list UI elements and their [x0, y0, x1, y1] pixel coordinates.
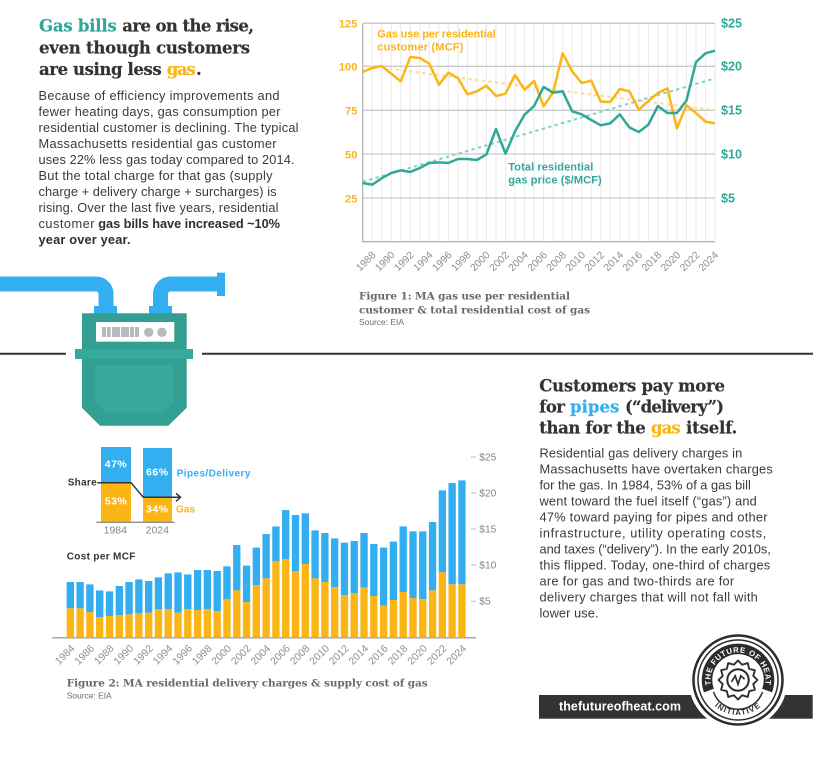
series label: gas use: Gas use per residential: [377, 29, 496, 41]
x axis years: 1990: [112, 643, 136, 667]
x axis years: 2006: [526, 250, 550, 274]
chart: cost per MCF stacked bars: [52, 453, 497, 667]
x axis years: 2002: [230, 643, 254, 667]
x axis years: 1986: [73, 643, 97, 667]
caption: figure 2: [67, 678, 428, 700]
body text: efficiency and consumption: year over year.: [38, 232, 130, 247]
chart: share of bill 1984 vs 2024: 2024: [146, 525, 169, 537]
heading: gas bills are on the rise: .: [196, 60, 202, 79]
heading: gas bills are on the rise: are using less: [39, 60, 162, 79]
body text: efficiency and consumption: customer: [38, 216, 95, 231]
body text: efficiency and consumption: But the total charge for that gas (supply: [38, 168, 273, 183]
x axis years: 2022: [678, 250, 703, 274]
body text: delivery charges: Residential gas delivery charges in: [540, 445, 742, 460]
x axis years: 2008: [545, 250, 569, 274]
chart: share of bill 1984 vs 2024: 53%: [105, 495, 127, 507]
x axis years: 2020: [659, 250, 683, 274]
right axis: price: $25: [721, 16, 742, 30]
right axis: price: $15: [721, 104, 742, 118]
chart: share of bill 1984 vs 2024: 47%: [105, 459, 127, 471]
body text: efficiency and consumption: [38, 88, 298, 247]
body text: delivery charges: went toward the fuel itself (“gas”) and: [538, 493, 757, 508]
body text: efficiency and consumption: uses 22% less gas today compared to 2014.: [38, 152, 294, 167]
icon: gas meter with pipes: [0, 273, 225, 426]
chart: share of bill 1984 vs 2024: 34%: [146, 503, 169, 515]
heading: customers pay more for pipes: (“delivery”): [625, 398, 724, 417]
heading: customers pay more for pipes: [539, 377, 737, 437]
x axis years: 2002: [488, 250, 512, 274]
footer bar with website: [539, 695, 813, 719]
x axis years: 1990: [374, 250, 398, 274]
caption: figure 2: Source: EIA: [67, 690, 112, 700]
x axis years: 2014: [347, 643, 371, 667]
chart: share of bill 1984 vs 2024: Gas: [176, 504, 195, 515]
x axis years: 1992: [393, 250, 417, 274]
x axis years: 2000: [469, 250, 493, 274]
series label: gas use: [377, 29, 496, 54]
heading: gas bills are on the rise: even though customers: [39, 38, 250, 57]
x axis years: 1996: [171, 643, 195, 667]
caption: figure 1: Source: EIA: [359, 317, 404, 327]
body text: delivery charges: Massachusetts have overtaken charges: [540, 461, 773, 476]
heading: gas bills are on the rise: are on the rise,: [122, 17, 254, 36]
price axis: $20: [479, 489, 497, 500]
body text: delivery charges: infrastructure, utility operating costs,: [540, 525, 766, 540]
price axis: $25: [479, 453, 497, 464]
x axis years: [354, 250, 721, 274]
left axis: gas use: 25: [345, 194, 358, 206]
body text: delivery charges: this flipped. Today, one-third of charges: [540, 557, 770, 572]
body text: efficiency and consumption: Massachusetts residential gas customer: [38, 136, 277, 151]
chart: gas use and residential price line chart: [339, 16, 742, 274]
body text: delivery charges: lower use.: [540, 605, 598, 620]
left axis: gas use: [339, 18, 358, 206]
x axis years: 2016: [621, 250, 645, 274]
body text: efficiency and consumption: residential customer is declining. The typical: [38, 120, 298, 135]
chart: share of bill 1984 vs 2024: 1984: [104, 525, 127, 537]
x axis years: 2020: [406, 643, 430, 667]
x axis years: 2016: [367, 643, 391, 667]
x axis years: 2022: [425, 643, 450, 667]
body text: delivery charges: [538, 445, 773, 620]
body text: delivery charges: are for gas and two-thirds are for: [540, 573, 735, 588]
right axis: price: $20: [721, 60, 742, 74]
right axis: price: $5: [721, 192, 735, 206]
caption: figure 2: Figure 2: MA residential delivery charges & supply cost of gas: [67, 678, 428, 690]
panel: pipes vs gas text: [538, 377, 773, 620]
x axis years: 1988: [354, 250, 379, 274]
body text: efficiency and consumption: gas bills have increased ~10%: [98, 216, 281, 231]
caption: figure 1: [359, 290, 590, 327]
x axis years: 2018: [386, 643, 411, 667]
x axis years: 1998: [191, 643, 215, 667]
price axis: $5: [479, 597, 491, 608]
x axis years: 1984: [53, 643, 78, 667]
body text: delivery charges: delivery charges that will not fall with: [540, 589, 758, 604]
chart: share of bill 1984 vs 2024: [68, 447, 251, 537]
body text: efficiency and consumption: charge + delivery charge + surcharges) is: [38, 184, 276, 199]
x axis years: 2024: [697, 250, 721, 274]
left axis: gas use: 125: [339, 18, 358, 30]
body text: efficiency and consumption: rising. Over the last five years, residential: [38, 200, 278, 215]
heading: customers pay more for pipes: for: [539, 398, 565, 417]
x axis years: 1994: [151, 643, 176, 667]
panel: gas bills text: [38, 17, 298, 247]
x axis years: 2010: [308, 643, 332, 667]
arrow: share line: [97, 483, 180, 501]
x axis years: 1994: [412, 250, 436, 274]
x axis years: 2018: [640, 250, 664, 274]
x axis years: 1996: [431, 250, 455, 274]
heading: gas bills are on the rise: [39, 17, 254, 79]
heading: gas bills are on the rise: Gas bills: [39, 17, 117, 36]
x axis years: 1992: [132, 643, 156, 667]
heading: customers pay more for pipes: gas: [651, 418, 681, 437]
price axis: $15: [479, 525, 497, 536]
right axis: price: $10: [721, 148, 742, 162]
label: cost per MCF: Cost per MCF: [67, 552, 135, 563]
heading: gas bills are on the rise: gas: [167, 60, 196, 79]
x axis years: 2012: [328, 643, 352, 667]
left axis: gas use: 75: [345, 106, 358, 118]
x axis years: 1998: [450, 250, 474, 274]
price axis: [479, 453, 497, 608]
x axis years: 2010: [564, 250, 588, 274]
series label: gas price: gas price ($/MCF): [508, 175, 602, 187]
body text: efficiency and consumption: Because of efficiency improvements and: [38, 88, 280, 103]
x axis years: 2024: [445, 643, 469, 667]
x axis years: 2004: [249, 643, 273, 667]
heading: customers pay more for pipes: itself.: [686, 418, 737, 437]
series label: gas use: customer (MCF): [377, 42, 464, 54]
series label: gas price: [508, 162, 602, 187]
heading: customers pay more for pipes: Customers pay more: [539, 377, 725, 396]
body text: delivery charges: and taxes (“delivery”). In the early 2010s,: [540, 541, 771, 556]
x axis years: 2014: [602, 250, 626, 274]
chart: share of bill 1984 vs 2024: 66%: [146, 467, 169, 479]
x axis years: 2008: [288, 643, 313, 667]
logo: the future of heat initiative: [690, 634, 786, 726]
x axis years: [53, 643, 469, 667]
body text: delivery charges: for the gas. In 1984, 53% of a gas bill: [540, 477, 751, 492]
logo: the future of heat initiative: THE FUTURE OF HEAT: [705, 647, 771, 686]
left axis: gas use: 50: [345, 150, 358, 162]
heading: customers pay more for pipes: than for the: [539, 418, 646, 437]
x axis years: 2000: [210, 643, 234, 667]
heading: customers pay more for pipes: pipes: [570, 398, 619, 417]
body text: efficiency and consumption: fewer heating days, gas consumption per: [38, 104, 281, 119]
series label: gas price: Total residential: [508, 162, 593, 174]
right axis: price: [721, 16, 742, 206]
caption: figure 1: Figure 1: MA gas use per residential: [359, 290, 570, 302]
body text: delivery charges: 47% toward paying for pipes and other: [540, 509, 768, 524]
x axis years: 2006: [269, 643, 293, 667]
left axis: gas use: 100: [339, 62, 358, 74]
x axis years: 1988: [93, 643, 117, 667]
chart: share of bill 1984 vs 2024: Pipes/Delivery: [177, 469, 251, 480]
logo: the future of heat initiative: INITIATIVE: [715, 702, 760, 715]
x axis years: 2004: [507, 250, 531, 274]
caption: figure 1: customer & total residential cost of gas: [359, 304, 590, 316]
x axis years: 2012: [583, 250, 607, 274]
price axis: $10: [479, 561, 497, 572]
footer bar with website: thefutureofheat.com: [559, 699, 681, 713]
chart: share of bill 1984 vs 2024: Share: [68, 478, 97, 489]
